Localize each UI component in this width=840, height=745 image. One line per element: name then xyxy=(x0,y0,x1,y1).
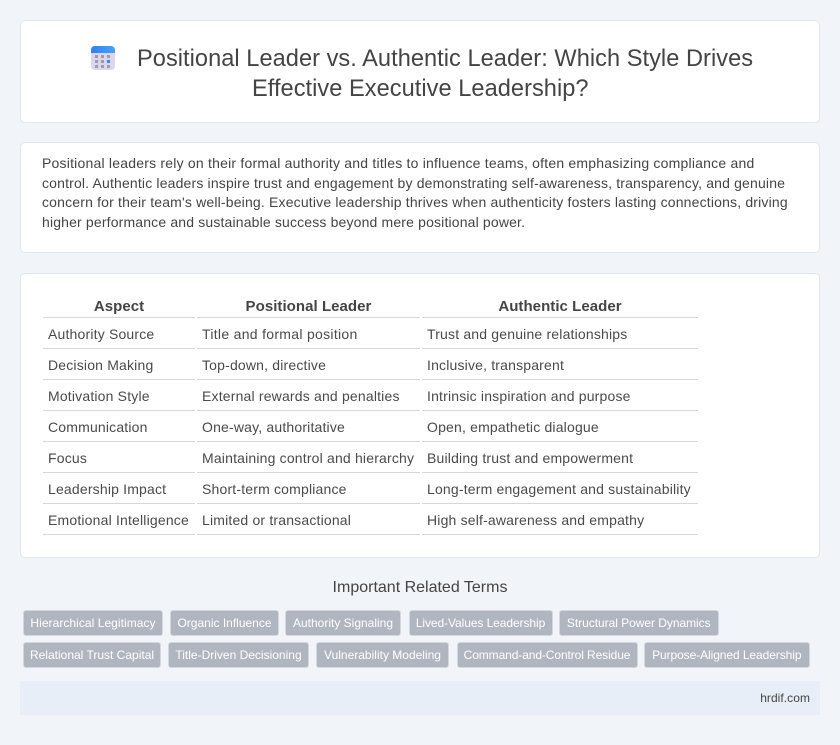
tag xyxy=(285,610,401,636)
tag xyxy=(559,610,718,636)
related terms heading: Important Related Terms xyxy=(333,579,507,596)
comparison table panel: Trust and genuine relationships xyxy=(427,326,627,342)
title: Effective Executive Leadership? xyxy=(252,76,589,102)
tag xyxy=(316,642,449,668)
comparison table panel: Intrinsic inspiration and purpose xyxy=(427,388,631,404)
tag xyxy=(644,642,810,668)
row: Emotional Intelligence: Emotional Intelligence xyxy=(48,512,189,528)
tag xyxy=(456,642,638,668)
comparison table panel: One-way, authoritative xyxy=(202,419,345,435)
tag: Title-Driven Decisioning xyxy=(175,648,302,662)
table header: Aspect: Aspect xyxy=(94,298,144,315)
tag xyxy=(23,642,161,668)
intro paragraph xyxy=(42,155,788,230)
comparison table panel: Open, empathetic dialogue xyxy=(427,419,599,435)
tag xyxy=(408,610,552,636)
row: Leadership Impact: Leadership Impact xyxy=(48,481,166,497)
comparison table panel: Maintaining control and hierarchy xyxy=(202,450,414,466)
comparison table panel: Limited or transactional xyxy=(202,512,351,528)
intro text panel xyxy=(20,142,820,253)
icon: calendar xyxy=(91,46,115,70)
comparison table panel: Inclusive, transparent xyxy=(427,357,564,373)
intro paragraph: control. Authentic leaders inspire trust and engagement by demonstrating self-awareness, transparency, and genuine xyxy=(42,174,785,190)
row: Decision Making: Decision Making xyxy=(48,357,153,373)
intro paragraph: concern for their team's well-being. Executive leadership thrives when authenticity fosters lasting connections, driving xyxy=(42,194,788,210)
tag: Purpose-Aligned Leadership xyxy=(652,648,801,662)
comparison table panel: High self-awareness and empathy xyxy=(427,512,644,528)
intro paragraph: higher performance and sustainable success beyond mere positional power. xyxy=(42,214,525,230)
tag xyxy=(23,610,163,636)
header panel xyxy=(20,20,820,123)
title: Positional Leader vs. Authentic Leader: Which Style Drives xyxy=(137,46,753,72)
comparison table panel: Building trust and empowerment xyxy=(427,450,633,466)
table header: Authentic Leader: Authentic Leader xyxy=(498,298,622,315)
comparison table panel xyxy=(20,273,820,558)
row: Focus: Focus xyxy=(48,450,87,466)
row: Authority Source: Authority Source xyxy=(48,326,154,342)
tag: Structural Power Dynamics xyxy=(567,616,711,630)
tag: Authority Signaling xyxy=(293,616,393,630)
comparison table panel: Top-down, directive xyxy=(202,357,326,373)
related terms tags xyxy=(23,610,810,668)
row: Motivation Style: Motivation Style xyxy=(48,388,150,404)
tag xyxy=(168,642,309,668)
footer bar xyxy=(20,681,820,715)
title xyxy=(137,46,753,102)
tag: Relational Trust Capital xyxy=(30,648,154,662)
tag: Organic Influence xyxy=(177,616,272,630)
tag xyxy=(170,610,279,636)
comparison table panel: Title and formal position xyxy=(202,326,358,342)
tag: Vulnerability Modeling xyxy=(324,648,441,662)
comparison table panel: Short-term compliance xyxy=(202,481,347,497)
tag: Hierarchical Legitimacy xyxy=(30,616,156,630)
tag: Lived-Values Leadership xyxy=(416,616,545,630)
tag: Command-and-Control Residue xyxy=(464,648,630,662)
table header: Positional Leader: Positional Leader xyxy=(246,298,371,315)
row: Communication: Communication xyxy=(48,419,148,435)
comparison table panel: Long-term engagement and sustainability xyxy=(427,481,691,497)
footer site name: hrdif.com xyxy=(760,690,810,704)
comparison table panel: External rewards and penalties xyxy=(202,388,400,404)
intro paragraph: Positional leaders rely on their formal authority and titles to influence teams, often emphasizing compliance and xyxy=(42,155,754,171)
